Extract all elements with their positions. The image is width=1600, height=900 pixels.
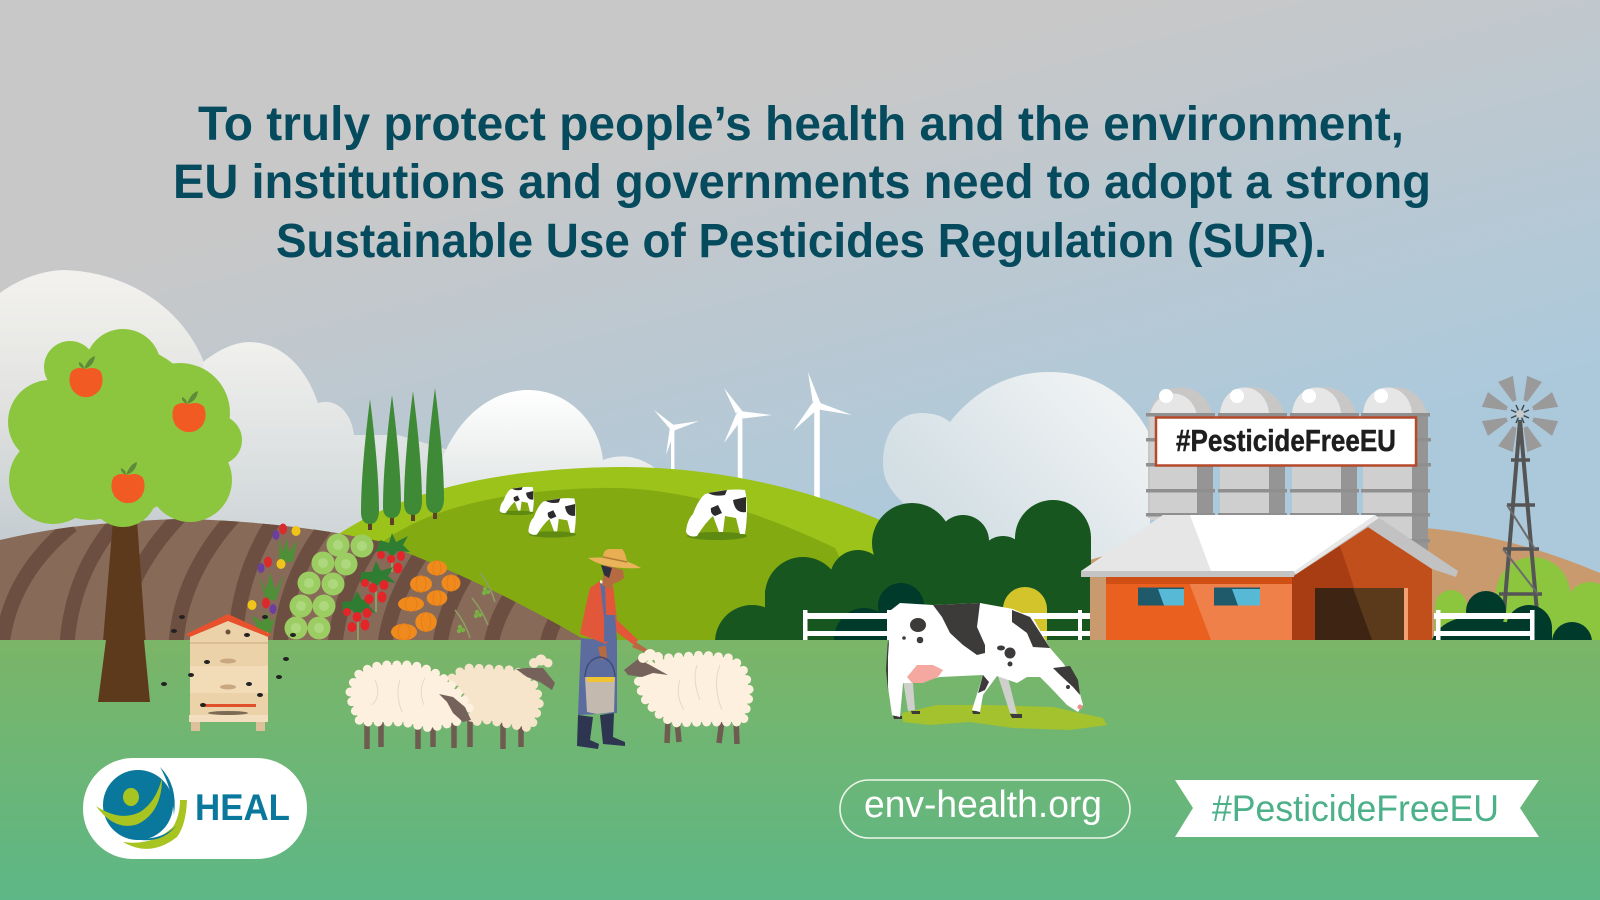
hashtag sign on silos <box>1156 418 1416 466</box>
barn gable <box>1292 527 1432 640</box>
title: Sustainable Use of Pesticides Regulation (SUR). <box>276 215 1327 268</box>
cow inner legs <box>903 676 1017 714</box>
farmer boots <box>577 713 625 749</box>
big cow <box>886 603 1083 719</box>
farmer <box>577 549 648 749</box>
bucket <box>585 657 615 714</box>
title <box>173 98 1431 268</box>
cow right <box>686 490 747 540</box>
sheep 1 (front) <box>350 665 471 749</box>
fence right <box>1434 610 1534 640</box>
bushes dark green <box>715 500 1091 679</box>
logo wordmark: HEAL <box>195 787 290 828</box>
farmer hat <box>603 549 627 563</box>
apple 3 <box>111 462 145 503</box>
website pill: env-health.org <box>864 784 1102 826</box>
face <box>516 668 555 690</box>
sheep 3 (right) <box>624 649 750 744</box>
barn roof <box>1081 515 1458 577</box>
green meadow <box>0 640 1600 900</box>
farmer overalls <box>578 615 617 715</box>
barn tan wall <box>1090 575 1110 640</box>
overall bib <box>600 581 617 642</box>
fence left <box>803 610 1105 640</box>
turbine 1 <box>654 410 699 472</box>
turbine 3 <box>793 372 852 502</box>
small cow left <box>500 487 534 515</box>
grazing cows on hill <box>500 487 747 540</box>
barn windows <box>1138 588 1260 606</box>
cow nose <box>1078 704 1082 710</box>
bees <box>161 615 296 707</box>
wool <box>638 655 750 723</box>
right bushes <box>1435 557 1600 640</box>
silo 1 <box>1148 387 1213 520</box>
bushes deep green and yellow <box>834 583 1047 640</box>
hashtag ribbon: #PesticideFreeEU <box>1212 788 1499 829</box>
windmill tower <box>1499 420 1542 612</box>
wool creases <box>678 665 722 710</box>
legs <box>454 720 521 749</box>
sheep 2 (back) <box>452 654 555 749</box>
face <box>439 694 471 722</box>
hashtag sign on silos: #PesticideFreeEU <box>1176 423 1396 458</box>
windmill <box>1482 376 1558 612</box>
farmer shirt <box>580 581 638 645</box>
cloud right <box>883 372 1150 570</box>
bean plants <box>455 573 495 638</box>
logo head dot <box>123 788 139 806</box>
website pill <box>840 780 1130 838</box>
grass patch under cow <box>902 705 1107 730</box>
cow body <box>888 603 1083 717</box>
face <box>624 659 668 677</box>
trunk lower part over meadow <box>98 640 150 702</box>
cabbages <box>284 534 374 640</box>
hive body <box>190 632 268 715</box>
sky background <box>0 0 1600 640</box>
tree crown <box>8 329 242 527</box>
turbine 2 <box>724 388 772 487</box>
tan hill behind barn <box>1090 528 1600 640</box>
ploughed field <box>0 514 585 645</box>
title: To truly protect people’s health and the environment, <box>198 98 1404 151</box>
farmer hands <box>598 642 648 660</box>
farmer collar <box>600 580 612 587</box>
apple 2 <box>172 391 206 432</box>
cow patches <box>933 603 1080 695</box>
logo green swoosh <box>96 778 162 826</box>
silo 4 <box>1363 387 1428 550</box>
right bushes foreground <box>1432 591 1592 662</box>
title: EU institutions and governments need to adopt a strong <box>173 156 1431 209</box>
apple 1 <box>69 356 103 397</box>
barn <box>1081 515 1458 640</box>
hashtag ribbon <box>1175 780 1539 837</box>
barn front wall <box>1106 577 1293 640</box>
fleece top <box>638 649 663 663</box>
barn door <box>1315 588 1408 640</box>
hive roof <box>186 614 271 637</box>
windmill spokes <box>1511 405 1529 423</box>
flowers <box>248 524 300 634</box>
logo blue arcs <box>130 767 176 840</box>
beehive <box>186 614 271 731</box>
legs <box>667 720 737 744</box>
cloud behind cypress trees <box>440 390 655 510</box>
small cow middle <box>528 498 576 538</box>
windmill blades <box>1482 376 1558 452</box>
logo lower swoosh <box>123 800 187 849</box>
apple tree <box>8 329 242 702</box>
silo 2 <box>1220 387 1285 520</box>
legs <box>367 718 433 749</box>
farmer head <box>602 565 624 590</box>
wool <box>452 668 540 728</box>
peppers <box>342 533 410 640</box>
cow udder <box>907 665 943 683</box>
tree trunk <box>98 520 150 702</box>
logo globe <box>103 770 173 840</box>
cow tail <box>886 640 893 690</box>
wool creases <box>372 678 425 712</box>
cow hooves <box>893 711 1022 719</box>
fleece top <box>529 654 552 668</box>
green hill light <box>330 467 900 640</box>
cypress trees <box>361 388 444 530</box>
silo 3 <box>1292 387 1357 520</box>
HEAL logo <box>83 758 307 859</box>
cow spots <box>902 618 1070 689</box>
windmill hub <box>1516 410 1524 418</box>
pumpkins <box>391 560 460 640</box>
logo pill <box>83 758 307 859</box>
silos <box>1146 387 1431 550</box>
green hill dark <box>375 488 880 640</box>
clouds left <box>0 270 455 560</box>
wool <box>350 665 470 728</box>
wind turbines <box>654 372 852 502</box>
